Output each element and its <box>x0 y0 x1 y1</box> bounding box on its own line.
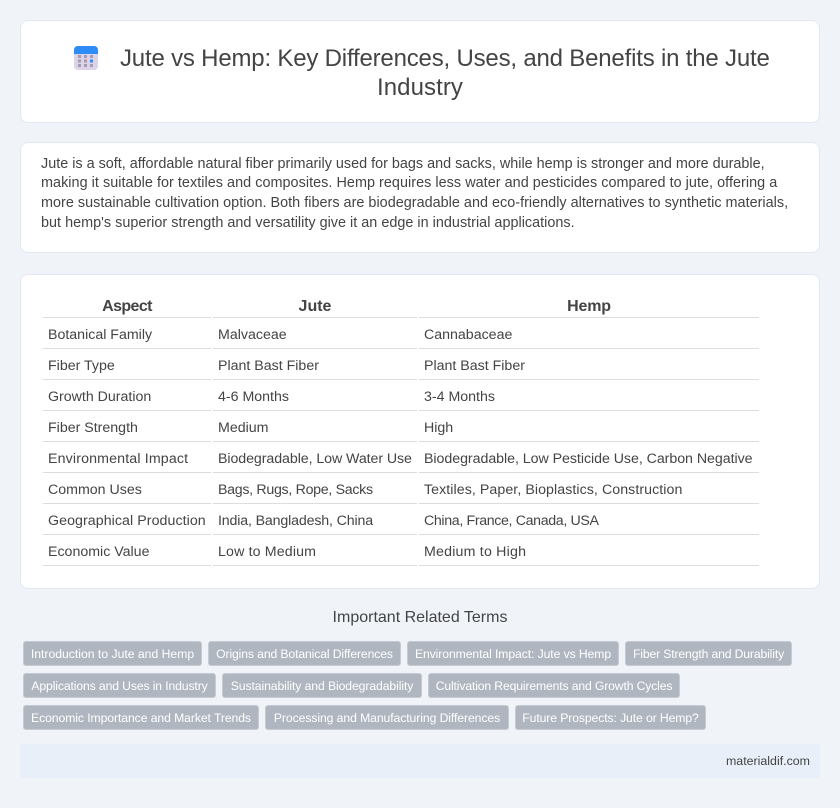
comparison table: Geographical Production <box>48 513 206 529</box>
related term tags: Fiber Strength and Durability <box>633 647 784 661</box>
related term tags: Future Prospects: Jute or Hemp? <box>522 711 699 725</box>
comparison table: Cannabaceae <box>424 327 512 343</box>
comparison table: Biodegradable, Low Water Use <box>218 451 412 467</box>
comparison table: Hemp <box>567 298 611 315</box>
comparison table: China, France, Canada, USA <box>424 513 599 529</box>
comparison table: Bags, Rugs, Rope, Sacks <box>218 482 373 498</box>
comparison table: Textiles, Paper, Bioplastics, Construction <box>424 482 682 498</box>
title <box>120 45 770 101</box>
comparison table: Aspect <box>102 298 152 315</box>
title: Jute vs Hemp: Key Differences, Uses, and Benefits in the Jute <box>120 45 770 72</box>
related term tags: Applications and Uses in Industry <box>31 679 208 693</box>
comparison table: Plant Bast Fiber <box>424 358 525 374</box>
comparison table: Low to Medium <box>218 544 316 560</box>
related term tags: Origins and Botanical Differences <box>216 647 393 661</box>
comparison table: 3-4 Months <box>424 389 495 405</box>
related term tags: Economic Importance and Market Trends <box>31 711 251 725</box>
comparison table: Environmental Impact <box>48 451 188 467</box>
title: Industry <box>377 74 463 101</box>
comparison table: 4-6 Months <box>218 389 289 405</box>
related term tags: Environmental Impact: Jute vs Hemp <box>415 647 611 661</box>
icon: calendar <box>74 46 98 70</box>
related term tags <box>23 641 792 730</box>
comparison table: Fiber Type <box>48 358 115 374</box>
comparison table: High <box>424 420 453 436</box>
related term tags: Introduction to Jute and Hemp <box>31 647 194 661</box>
related terms heading: Important Related Terms <box>333 609 507 626</box>
comparison table: Plant Bast Fiber <box>218 358 319 374</box>
related term tags: Sustainability and Biodegradability <box>231 679 413 693</box>
comparison table: Economic Value <box>48 544 149 560</box>
comparison table: Biodegradable, Low Pesticide Use, Carbon Negative <box>424 451 752 467</box>
comparison table: Malvaceae <box>218 327 287 343</box>
related term tags: Cultivation Requirements and Growth Cycles <box>436 679 672 693</box>
comparison table: Growth Duration <box>48 389 151 405</box>
comparison table: Botanical Family <box>48 327 152 343</box>
footer bar <box>20 744 820 778</box>
comparison table panel <box>20 274 820 589</box>
comparison table: Jute <box>299 298 331 315</box>
header panel <box>20 20 820 123</box>
comparison table: Common Uses <box>48 482 142 498</box>
comparison table: Fiber Strength <box>48 420 138 436</box>
comparison table: Medium to High <box>424 544 526 560</box>
intro paragraph: making it suitable for textiles and composites. Hemp requires less water and pesticides compared to jute, offering a <box>41 175 777 191</box>
comparison table: Medium <box>218 420 268 436</box>
comparison table: India, Bangladesh, China <box>218 513 373 529</box>
intro text panel <box>20 142 820 253</box>
intro paragraph: Jute is a soft, affordable natural fiber primarily used for bags and sacks, while hemp is stronger and more durable, <box>41 156 765 172</box>
intro paragraph: but hemp's superior strength and versatility give it an edge in industrial applications. <box>41 215 575 231</box>
footer site name: materialdif.com <box>726 754 810 768</box>
comparison table <box>43 298 759 566</box>
intro paragraph: more sustainable cultivation option. Both fibers are biodegradable and eco-friendly alternatives to synthetic materials, <box>41 195 788 211</box>
related term tags: Processing and Manufacturing Differences <box>274 711 500 725</box>
intro paragraph <box>41 156 788 231</box>
